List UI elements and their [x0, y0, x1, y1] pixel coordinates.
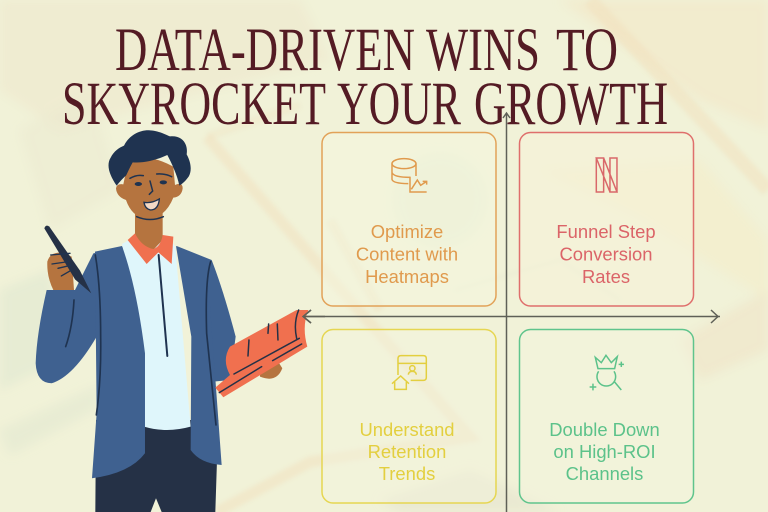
title: WINS — [426, 17, 540, 84]
text: retention: Retention — [368, 441, 446, 462]
pants — [95, 420, 218, 512]
icon: N logo — [596, 158, 617, 192]
icon: database with chart — [392, 159, 427, 192]
text: optimize content: Optimize — [371, 221, 443, 242]
title: TO — [556, 17, 618, 84]
title: DATA-DRIVEN — [115, 17, 415, 84]
text: retention: Understand — [359, 419, 455, 440]
face — [116, 158, 183, 219]
quadrant axes — [300, 113, 720, 512]
text: double down: Channels — [566, 463, 643, 484]
face details — [130, 174, 172, 219]
jacket creases — [66, 255, 216, 425]
panel: double down — [520, 330, 694, 503]
text: optimize content: Content with — [356, 244, 458, 264]
text: double down: on High-ROI — [553, 441, 656, 462]
pen — [44, 226, 91, 293]
panel: funnel step — [520, 132, 694, 306]
book — [215, 310, 308, 397]
jacket right arm — [177, 246, 236, 382]
panel: optimize content — [322, 132, 496, 306]
mouth — [144, 199, 159, 210]
book hand — [260, 357, 282, 379]
text: funnel step: Conversion — [559, 244, 653, 264]
text: funnel step: Rates — [582, 266, 630, 287]
hand with pen — [47, 253, 74, 290]
neck — [135, 212, 163, 253]
head and neck — [109, 130, 191, 264]
icon: crown and magnifier — [590, 355, 624, 390]
collar — [128, 233, 173, 264]
text: double down: Double Down — [549, 419, 660, 440]
fingers — [51, 253, 72, 276]
jacket left panel — [92, 246, 145, 478]
illustration: presenter holding pen and book — [36, 130, 308, 512]
icon: profile window and house — [392, 356, 426, 389]
text: retention: Trends — [379, 463, 435, 484]
title: YOUR — [337, 71, 461, 138]
title: SKYROCKET — [62, 71, 326, 138]
arrow tip over book — [303, 310, 325, 323]
jacket arm left — [36, 247, 130, 383]
jacket right panel — [176, 246, 222, 465]
text: optimize content: Heatmaps — [365, 266, 449, 287]
title — [62, 17, 668, 138]
hair — [109, 130, 191, 186]
shirt — [122, 237, 191, 430]
panel: retention — [322, 330, 496, 503]
text: funnel step: Funnel Step — [556, 221, 656, 242]
title: GROWTH — [474, 71, 668, 138]
